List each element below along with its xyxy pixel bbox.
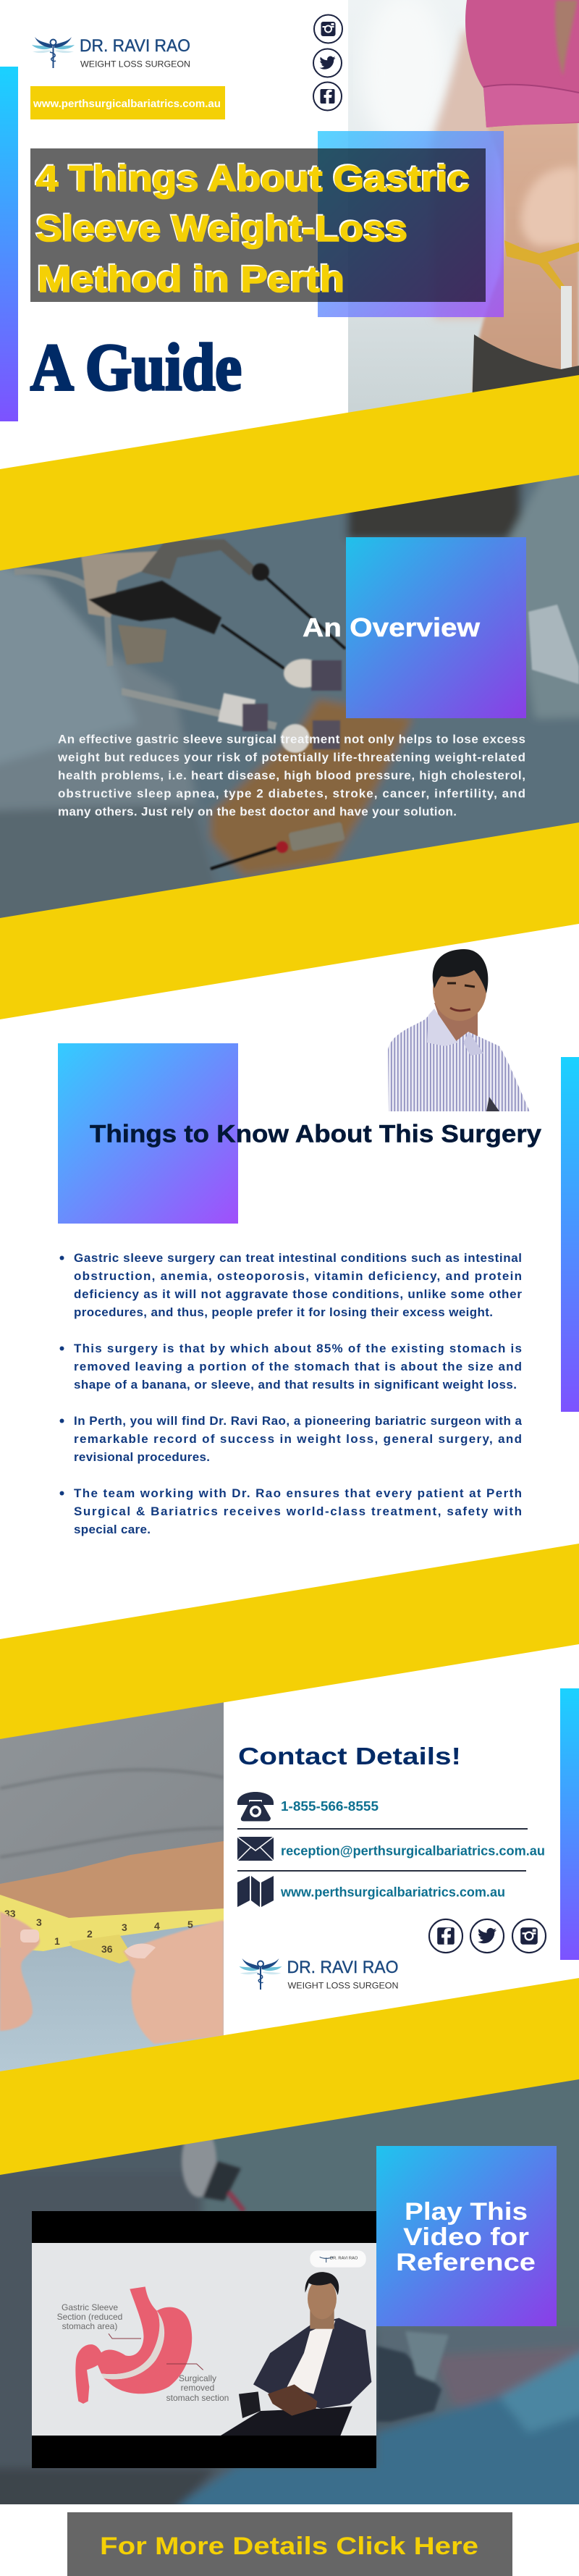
title text (36, 159, 470, 300)
bullet 1: procedures, and thus, people prefer it for losing their excess weight. (74, 1305, 493, 1319)
icon: telephone (237, 1792, 274, 1822)
bullet 4 (59, 1486, 522, 1536)
yellow band 1 (0, 375, 579, 571)
bullet 1: deficiency as it will not aggravate those conditions, unlike some other (74, 1287, 522, 1301)
bullet 4: The team working with Dr. Rao ensures that every patient at Perth (74, 1486, 522, 1500)
tape numbers: 2 (87, 1928, 93, 1940)
icon: instagram (314, 14, 342, 43)
tape numbers: 36 (101, 1943, 113, 1955)
bullet 2 (59, 1342, 522, 1392)
title text: Sleeve Weight-Loss (36, 209, 407, 249)
video logo pill (310, 2250, 366, 2268)
heading: An Overview: An Overview (303, 613, 481, 642)
bullet 4: special care. (74, 1523, 151, 1536)
call-to-action button: For More Details Click Here (100, 2533, 478, 2560)
video label: removed section: Surgically (179, 2373, 216, 2383)
overview paragraph: An effective gastric sleeve surgical treatment not only helps to lose excess (58, 733, 525, 746)
bullet 2: removed leaving a portion of the stomach that is about the size and (74, 1360, 522, 1373)
video label: sleeve section: Gastric Sleeve (62, 2302, 118, 2312)
icon: envelope (237, 1837, 274, 1861)
stomach: sleeve (75, 2286, 159, 2404)
tape numbers: 4 (154, 1920, 160, 1932)
overview paragraph: health problems, i.e. heart disease, high blood pressure, high cholesterol, (58, 769, 525, 782)
icon: caduceus wings (239, 1958, 282, 1990)
heading: Things to Know About This Surgery: Things to Know About This Surgery (90, 1121, 541, 1148)
icon: caduceus wings (32, 37, 75, 68)
icon: facebook (313, 83, 342, 110)
title panel (30, 148, 486, 302)
video label: sleeve section: Section (reduced (57, 2312, 122, 2322)
tape numbers: 3 (36, 1916, 42, 1928)
narrator (219, 2272, 371, 2436)
overview photo: surgery (0, 463, 579, 934)
logo: Dr. Ravi Rao (32, 36, 190, 70)
tape numbers: 33 (4, 1908, 16, 1919)
icon: instagram (contact) (512, 1919, 546, 1953)
bullet 4: Surgical & Bariatrics receives world-class treatment, safety with (74, 1504, 522, 1518)
caption text: Play This (405, 2198, 528, 2226)
phone number: 1-855-566-8555 (281, 1799, 379, 1814)
video caption panel (376, 2146, 557, 2326)
video label: removed section: stomach section (166, 2393, 229, 2403)
title text: Method in Perth (38, 259, 345, 300)
video label: sleeve section (57, 2302, 122, 2331)
bottom photo: operating table (0, 2063, 579, 2527)
video label: sleeve section: stomach area) (62, 2321, 117, 2331)
bullet 2: shape of a banana, or sleeve, and that results in significant weight loss. (74, 1378, 517, 1392)
web address: www.perthsurgicalbariatrics.com.au (280, 1885, 505, 1900)
hero photo: woman measuring waist (348, 0, 579, 413)
bullet 2: This surgery is that by which about 85% of the existing stomach is (74, 1342, 522, 1355)
call-to-action button (67, 2512, 512, 2576)
right gradient bar (contact) (560, 1688, 579, 1960)
heading: Contact Details!: Contact Details! (238, 1743, 461, 1769)
bullet 3: remarkable record of success in weight loss, general surgery, and (74, 1432, 522, 1446)
surgical instruments (14, 539, 579, 869)
overview paragraph: many others. Just rely on the best doctor and have your solution. (58, 805, 457, 818)
overview paragraph: weight but reduces your risk of potentially life-threatening weight-related (57, 750, 525, 765)
tape numbers: 1 (54, 1935, 60, 1947)
email: reception@perthsurgicalbariatrics.com.au (281, 1843, 545, 1858)
right gradient bar (561, 1057, 579, 1412)
section gradient square (58, 1043, 238, 1224)
website badge (30, 86, 225, 119)
bullet 1 (59, 1251, 522, 1319)
overview paragraph: obstructive sleep apnea, type 2 diabetes, stroke, cancer, infertility, and (58, 786, 525, 801)
bullet 1: obstruction, anemia, osteoporosis, vitamin deficiency, and protein (74, 1269, 522, 1283)
video logo pill: DR. RAVI RAO (330, 2257, 358, 2261)
bullet 3 (59, 1414, 523, 1464)
website badge: www.perthsurgicalbariatrics.com.au (33, 98, 221, 110)
bullet 3: revisional procedures. (74, 1450, 210, 1464)
overview paragraph (57, 733, 525, 818)
yellow band 4 (0, 1978, 579, 2175)
tape numbers (4, 1910, 193, 1953)
icon: twitter (313, 49, 342, 77)
icon: map (237, 1876, 274, 1907)
logo: Dr. Ravi Rao (contact) (239, 1958, 398, 1991)
heading: A Guide: A Guide (30, 330, 242, 404)
contact photo: tape measure (0, 1694, 224, 2078)
logo name: DR. RAVI RAO (287, 1958, 398, 1977)
logo name: DR. RAVI RAO (80, 36, 190, 56)
video label: removed section (166, 2375, 229, 2401)
yellow band 3 (0, 1544, 579, 1739)
overview gradient square (346, 537, 526, 718)
title overlay: gradient square (318, 131, 504, 317)
bullet 3: In Perth, you will find Dr. Ravi Rao, a pioneering bariatric surgeon with a (74, 1414, 523, 1428)
yellow band 2 (0, 822, 579, 1019)
tape numbers: 5 (187, 1919, 193, 1930)
doctor portrait (388, 949, 530, 1111)
title text: 4 Things About Gastric (36, 159, 470, 199)
left gradient bar (0, 67, 18, 421)
video thumbnail (32, 2211, 376, 2468)
caption text (396, 2198, 536, 2276)
video label: removed section: removed (181, 2383, 214, 2393)
bullet 1: Gastric sleeve surgery can treat intestinal conditions such as intestinal (74, 1251, 522, 1265)
caption text: Reference (396, 2249, 536, 2276)
icon: facebook (contact) (429, 1919, 462, 1953)
tape numbers: 3 (122, 1922, 127, 1933)
stomach: removed section (103, 2307, 192, 2394)
icon: twitter (contact) (470, 1919, 504, 1953)
logo tagline: WEIGHT LOSS SURGEON (80, 59, 190, 70)
bullet list (59, 1251, 523, 1536)
logo tagline: WEIGHT LOSS SURGEON (288, 1981, 398, 1991)
caption text: Video for (403, 2223, 529, 2251)
